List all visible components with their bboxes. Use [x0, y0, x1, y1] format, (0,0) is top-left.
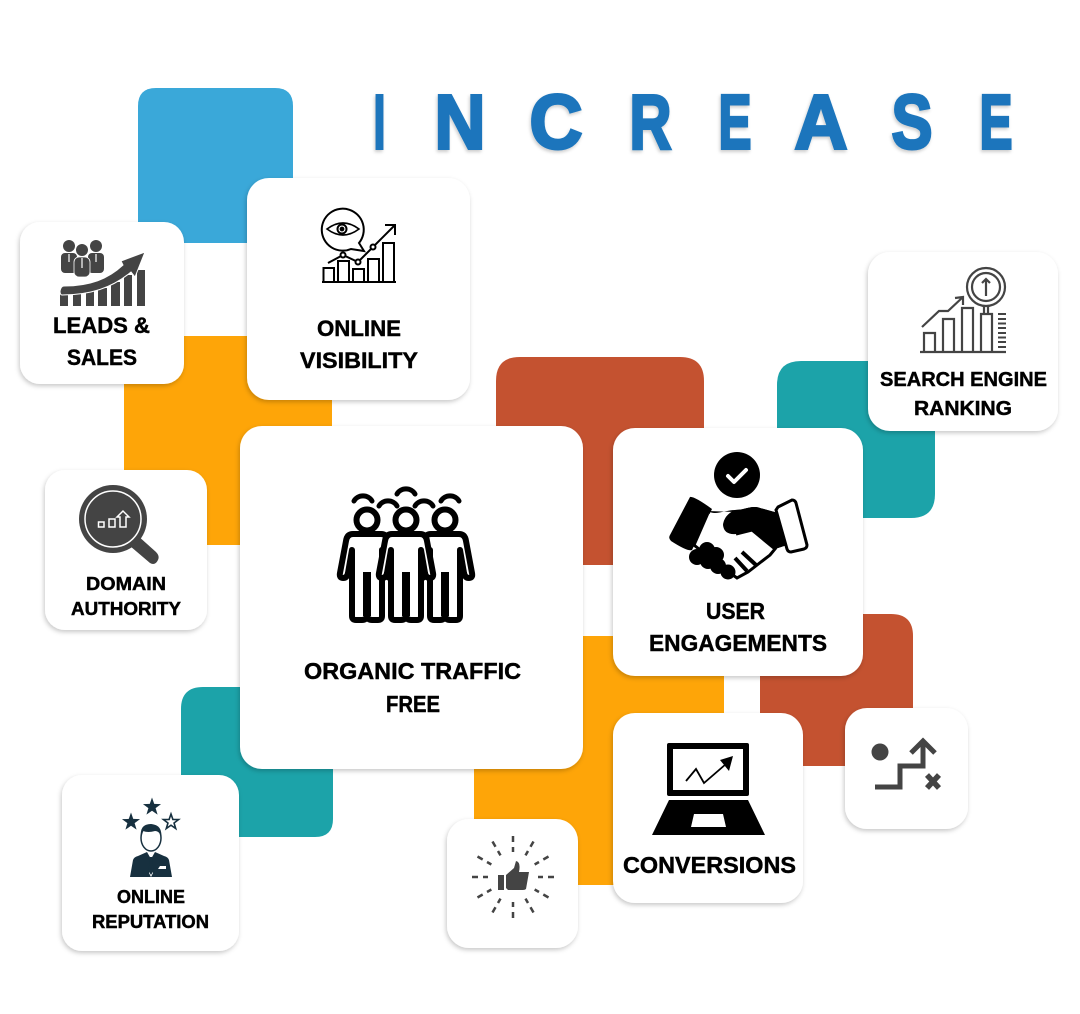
icon: laptop with rising line: [652, 743, 765, 835]
card: organic traffic free: [240, 426, 583, 769]
card: domain authority: DOMAIN: [86, 574, 166, 594]
card: online reputation: [62, 775, 239, 951]
card: domain authority: AUTHORITY: [71, 599, 181, 619]
card: user engagements: USER: [706, 598, 765, 624]
card: leads and sales: SALES: [67, 345, 137, 370]
title: C: [530, 80, 582, 166]
icon: eye and chart: [322, 209, 396, 282]
card: organic traffic free: FREE: [386, 691, 440, 717]
card: online visibility: [247, 178, 470, 400]
icon: chart and magnifier: [920, 268, 1006, 352]
title: I: [374, 80, 386, 166]
blue square: [138, 88, 293, 243]
teal square lower left: [181, 687, 333, 837]
card: domain authority: [45, 470, 207, 630]
card: online reputation: REPUTATION: [92, 912, 209, 932]
icon: steps with arrow and cross: [872, 741, 939, 788]
card: organic traffic free: ORGANIC TRAFFIC: [304, 658, 521, 684]
card: conversions: CONVERSIONS: [623, 852, 796, 878]
title: N: [434, 80, 486, 166]
title: A: [794, 80, 848, 166]
red square lower right: [760, 614, 913, 766]
orange square lower: [474, 636, 724, 885]
card: stairs icon: [845, 708, 968, 829]
card: leads and sales: LEADS &: [53, 313, 150, 338]
icon: thumb with rays: [472, 836, 554, 918]
icon: handshake with check: [669, 452, 807, 580]
card: user engagements: ENGAGEMENTS: [649, 630, 827, 656]
card: online reputation: ONLINE: [117, 887, 185, 907]
card: leads and sales: [20, 222, 184, 384]
orange square upper left: [124, 336, 332, 545]
icon: magnifier with chart: [79, 485, 159, 564]
icon: person with stars: [122, 798, 179, 877]
card: online visibility: ONLINE: [317, 316, 401, 341]
title: R: [630, 80, 672, 166]
card: search engine ranking: RANKING: [914, 398, 1012, 420]
title: E: [980, 80, 1012, 166]
card: thumbs up icon: [447, 819, 578, 948]
icon: group of people: [340, 489, 472, 620]
card: search engine ranking: SEARCH ENGINE: [880, 369, 1047, 391]
teal square right: [777, 361, 935, 518]
red square centre: [496, 357, 704, 565]
card: online visibility: VISIBILITY: [300, 348, 418, 373]
title: S: [892, 80, 932, 166]
icon: people and growth arrow: [60, 240, 145, 306]
card: conversions: [613, 713, 803, 903]
card: search engine ranking: [868, 252, 1058, 431]
title: E: [718, 80, 752, 166]
card: user engagements: [613, 428, 863, 676]
